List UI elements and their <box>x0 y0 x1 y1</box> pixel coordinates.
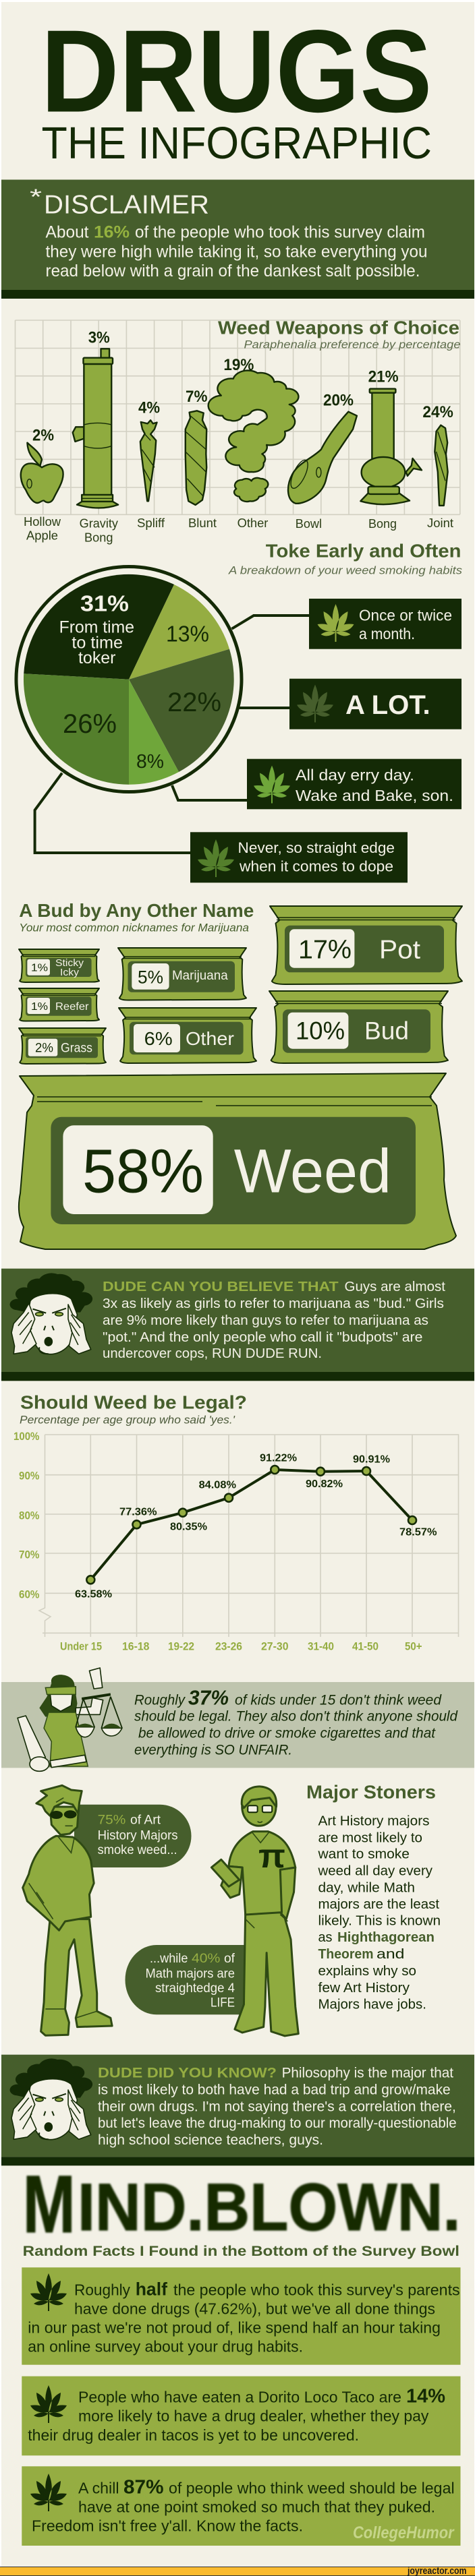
disclaimer text: read below with a grain of the dankest salt possible. <box>46 262 420 280</box>
legal heading: Should Weed be Legal? <box>20 1391 247 1412</box>
weapon labels: Hollow <box>24 515 61 529</box>
speech bubble: math: LIFE <box>211 1996 235 2010</box>
weapon labels: Spliff <box>137 516 165 530</box>
weapon labels: Blunt <box>188 516 217 530</box>
disclaimer text: About <box>46 222 89 241</box>
disclaimer text: 16% <box>94 222 130 241</box>
panel: a bud by any other name <box>19 900 462 1249</box>
fact: half: Roughly <box>74 2281 130 2298</box>
callout: never <box>190 832 408 882</box>
bag: other: 6% <box>144 1028 173 1049</box>
line chart: 70% <box>19 1549 39 1561</box>
panel: mind blown <box>22 2158 461 2546</box>
line chart: 91.22% <box>260 1452 297 1464</box>
pie chart: From time <box>59 618 134 636</box>
bag: marijuana: 5% <box>138 967 163 987</box>
bag: reefer <box>19 988 99 1021</box>
weapon labels: Apple <box>26 529 58 543</box>
weapon percentages: 24% <box>422 403 453 421</box>
disclaimer text: they were high while taking it, so take everything you <box>46 243 428 262</box>
under 15 text: Roughly <box>134 1692 186 1708</box>
fact: half: have done drugs (47.62%), but we've all done things <box>74 2300 435 2317</box>
major stoners text: weed all day every <box>318 1863 433 1879</box>
fact: puked: Freedom isn't free y'all. Know the facts. <box>32 2517 303 2534</box>
bag: reefer: Reefer <box>55 1001 89 1013</box>
dude text: "pot." And the only people who call it "budpots" are <box>103 1329 422 1345</box>
disclaimer text: of the people who took this survey claim <box>135 222 425 241</box>
major stoners text: Art History majors <box>318 1813 429 1828</box>
major stoners heading: Major Stoners <box>306 1781 436 1802</box>
dude text: high school science teachers, guys. <box>98 2132 323 2148</box>
bag: bud: Bud <box>364 1017 409 1045</box>
fact: taco: more likely to have a drug dealer, whether they pay <box>78 2407 429 2425</box>
pie chart: 31% <box>80 591 129 616</box>
weapon percentages: 4% <box>138 399 160 417</box>
weapon percentages: 7% <box>186 388 208 406</box>
fact: half: in our past we're not proud of, like spend half an hour taking <box>28 2319 441 2337</box>
mind blown heading: IND.BLOWN. <box>78 2169 460 2244</box>
dude text: are 9% more likely than guys to refer to marijuana as <box>103 1313 428 1328</box>
major stoners text: few Art History <box>318 1980 410 1996</box>
dude text: DUDE DID YOU KNOW? <box>98 2066 277 2081</box>
bag: other <box>119 1008 256 1063</box>
character: math major <box>211 1787 298 2036</box>
line chart: 31-40 <box>308 1640 334 1652</box>
bag: pot: 17% <box>298 936 352 965</box>
line chart: 63.58% <box>75 1588 112 1600</box>
speech bubble: art history: smoke weed... <box>98 1843 177 1857</box>
icon: joint <box>435 425 448 506</box>
footer bar <box>0 2565 475 2576</box>
icon: shocked dude face <box>10 2058 92 2140</box>
panel: dude can you believe that <box>1 1269 474 1381</box>
toke heading: Toke Early and Often <box>266 541 461 562</box>
callout: once or twice: a month. <box>359 625 415 642</box>
disclaimer heading: DISCLAIMER <box>44 190 209 220</box>
major stoners text: are most likely to <box>318 1830 422 1845</box>
dude text: 3x as likely as girls to refer to marijuana as "bud." Girls <box>103 1296 444 1311</box>
bud subtitle: Your most common nicknames for Marijuana <box>19 922 249 934</box>
pie chart: toker <box>78 649 116 667</box>
bag: sticky icky: Sticky <box>55 957 84 969</box>
dude text: undercover cops, RUN DUDE RUN. <box>103 1346 322 1361</box>
under 15 text: be allowed to drive or smoke cigarettes and that <box>138 1726 436 1741</box>
icon: smoke question mark <box>208 371 298 502</box>
line chart: 19-22 <box>168 1640 194 1652</box>
speech bubble: math: 40% <box>192 1952 221 1966</box>
bag: weed: Weed <box>234 1137 391 1205</box>
line chart: 50+ <box>405 1640 422 1652</box>
dude text: their own drugs. I'm not saying there's a correlation there, <box>98 2099 456 2115</box>
speech bubble: math <box>125 1945 251 2014</box>
pie chart: 22% <box>167 688 221 717</box>
weapon percentages <box>32 328 453 445</box>
character: math major: π <box>258 1837 285 1875</box>
line chart: 16-18 <box>122 1640 149 1652</box>
line chart: 23-26 <box>215 1640 242 1652</box>
icon: spliff <box>140 420 157 501</box>
bag: weed: 58% <box>82 1137 204 1205</box>
icon: hollow apple <box>21 443 63 503</box>
callout: once or twice <box>309 599 462 649</box>
bag: grass <box>19 1028 106 1064</box>
under 15 text: of kids under 15 don't think weed <box>235 1692 442 1708</box>
bag: bud: 10% <box>296 1017 345 1045</box>
line chart: 84.08% <box>199 1480 236 1491</box>
under 15 text: everything is SO UNFAIR. <box>134 1742 292 1758</box>
callout: once or twice: Once or twice <box>359 607 452 624</box>
pie chart: 8% <box>136 751 164 773</box>
callout: never: when it comes to dope <box>239 858 393 875</box>
weapon labels <box>24 515 453 544</box>
major stoners text: as <box>318 1929 332 1945</box>
toke subtitle: A breakdown of your weed smoking habits <box>228 564 463 577</box>
bag: sticky icky: 1% <box>31 963 48 974</box>
dude text: DUDE CAN YOU BELIEVE THAT <box>103 1279 339 1294</box>
speech bubble: art history <box>74 1805 192 1867</box>
major stoners text: Highthagorean <box>337 1929 435 1945</box>
bag: weed <box>19 1073 456 1249</box>
weapons subtitle: Paraphenalia preference by percentage <box>244 338 460 351</box>
fact: taco <box>22 2376 461 2455</box>
bag: sticky icky <box>19 949 99 982</box>
bag: pot <box>270 906 462 984</box>
pie chart: 26% <box>63 709 117 739</box>
speech bubble: art history: History Majors <box>98 1828 178 1843</box>
speech bubble: math: straightedge 4 <box>155 1981 235 1996</box>
major stoners text: likely. This is known <box>318 1913 441 1929</box>
major stoners text: majors are the least <box>318 1896 439 1912</box>
icon: blunt <box>186 411 206 505</box>
weapon labels: Bowl <box>296 517 322 531</box>
panel: dude did you know <box>1 2055 474 2165</box>
bud heading: A Bud by Any Other Name <box>19 900 254 921</box>
character: art history major <box>23 1785 112 2035</box>
major stoners text: Theorem <box>318 1946 374 1962</box>
panel: weed weapons of choice <box>15 318 460 544</box>
pie chart: to time <box>72 634 123 653</box>
line chart: 90% <box>19 1469 39 1482</box>
bag: bud <box>269 991 448 1063</box>
fact: taco: 14% <box>406 2385 445 2407</box>
weapon labels: Bong <box>84 531 113 544</box>
callout: all day: All day erry day. <box>296 767 414 784</box>
speech bubble: math: ...while <box>150 1952 188 1966</box>
fact: taco: People who have eaten a Dorito Loco Taco are <box>78 2388 401 2405</box>
panel: major stoners <box>23 1781 441 2036</box>
icon: bong <box>360 389 422 504</box>
fact: puked <box>22 2466 461 2546</box>
bag: pot: Pot <box>379 936 420 965</box>
icon: shocked dude face <box>10 1273 92 1354</box>
weapon labels: Other <box>238 516 268 530</box>
disclaimer heading: * <box>30 185 42 209</box>
panel: toke early and often <box>16 541 463 882</box>
major stoners text: want to smoke <box>317 1847 410 1862</box>
weapon illustrations <box>21 349 448 508</box>
title: THE INFOGRAPHIC <box>42 118 432 169</box>
weapon percentages: 21% <box>368 368 399 386</box>
fact: half: an online survey about your drug habits. <box>28 2337 303 2355</box>
mind blown heading: M <box>23 2158 76 2250</box>
bag: sticky icky: Icky <box>60 967 80 978</box>
callout: all day <box>247 759 462 809</box>
major stoners text: Majors have jobs. <box>318 1996 426 2012</box>
speech bubble: art history: of Art <box>130 1814 161 1828</box>
line chart: 90.82% <box>306 1478 343 1490</box>
weapon percentages: 2% <box>32 427 54 445</box>
callout: a lot <box>289 679 462 729</box>
line chart: 41-50 <box>352 1640 379 1652</box>
fact: puked: have at one point smoked so much that they puked. <box>78 2498 435 2516</box>
icon: lady justice with bong <box>18 1668 122 1771</box>
callout: never: Never, so straight edge <box>238 839 395 856</box>
collegehumor logo: CollegeHumor <box>353 2523 455 2542</box>
fact: taco: their drug dealer in tacos is yet to be uncovered. <box>28 2426 359 2444</box>
icon: bowl pipe <box>287 412 357 504</box>
line chart: 80% <box>19 1509 39 1522</box>
title: DRUGS <box>40 5 432 136</box>
bag: other: Other <box>186 1028 234 1049</box>
weapons heading: Weed Weapons of Choice <box>218 318 459 338</box>
line chart: 78.57% <box>399 1527 437 1538</box>
line chart: 90.91% <box>353 1454 390 1465</box>
weapon labels: Gravity <box>80 517 118 531</box>
fact: puked: A chill <box>78 2479 119 2496</box>
dude text: is most likely to both have had a bad trip and grow/make <box>98 2083 451 2098</box>
line chart: 60% <box>19 1588 39 1601</box>
fact: half <box>22 2267 461 2365</box>
speech bubble: math: Math majors are <box>146 1967 235 1981</box>
bag: marijuana <box>118 948 246 1000</box>
pie chart: 13% <box>166 622 209 647</box>
speech bubble: math: of <box>224 1952 235 1966</box>
weapon percentages: 19% <box>223 356 254 374</box>
panel: disclaimer <box>1 179 474 299</box>
bag: grass: Grass <box>61 1042 92 1056</box>
fact: puked: 87% <box>123 2476 164 2498</box>
major stoners text: day, while Math <box>318 1880 415 1896</box>
under 15 text: 37% <box>188 1685 229 1709</box>
icon: gravity bong <box>73 349 118 508</box>
bag: reefer: 1% <box>31 1001 48 1013</box>
pie chart <box>16 566 242 791</box>
weapon labels: Joint <box>427 516 453 530</box>
major stoners text: and <box>376 1946 405 1962</box>
line chart: Under 15 <box>60 1640 102 1652</box>
line chart: 80.35% <box>170 1521 207 1532</box>
callout: a lot: A LOT. <box>345 690 430 720</box>
dude text: but let's leave the drug-making to our morally-questionable <box>98 2116 457 2131</box>
major stoners text: explains why so <box>318 1963 416 1979</box>
under 15 text: should be legal. They also don't think anyone should <box>134 1709 458 1725</box>
line chart: 77.36% <box>119 1506 157 1518</box>
dude text: Philosophy is the major that <box>282 2066 453 2081</box>
legal subtitle: Percentage per age group who said 'yes.' <box>20 1414 235 1427</box>
speech bubble: art history: 75% <box>98 1814 125 1828</box>
panel: under 15 callout <box>1 1668 474 1771</box>
mind blown subtitle: Random Facts I Found in the Bottom of the Survey Bowl <box>23 2244 459 2259</box>
fact: half: half <box>136 2279 168 2299</box>
weapon percentages: 20% <box>323 391 354 409</box>
panel: should weed be legal <box>13 1391 459 1652</box>
line chart <box>13 1430 459 1652</box>
fact: puked: of people who think weed should be legal <box>169 2479 455 2496</box>
weapon labels: Bong <box>368 517 397 531</box>
bag: grass: 2% <box>35 1042 53 1056</box>
weapon percentages: 3% <box>88 328 110 347</box>
line chart: 27-30 <box>261 1640 289 1652</box>
callout: all day: Wake and Bake, son. <box>296 787 453 804</box>
fact: half: the people who took this survey's parents <box>173 2281 460 2298</box>
bag: marijuana: Marijuana <box>172 969 228 983</box>
line chart: 100% <box>13 1430 39 1443</box>
dude text: Guys are almost <box>344 1279 445 1294</box>
